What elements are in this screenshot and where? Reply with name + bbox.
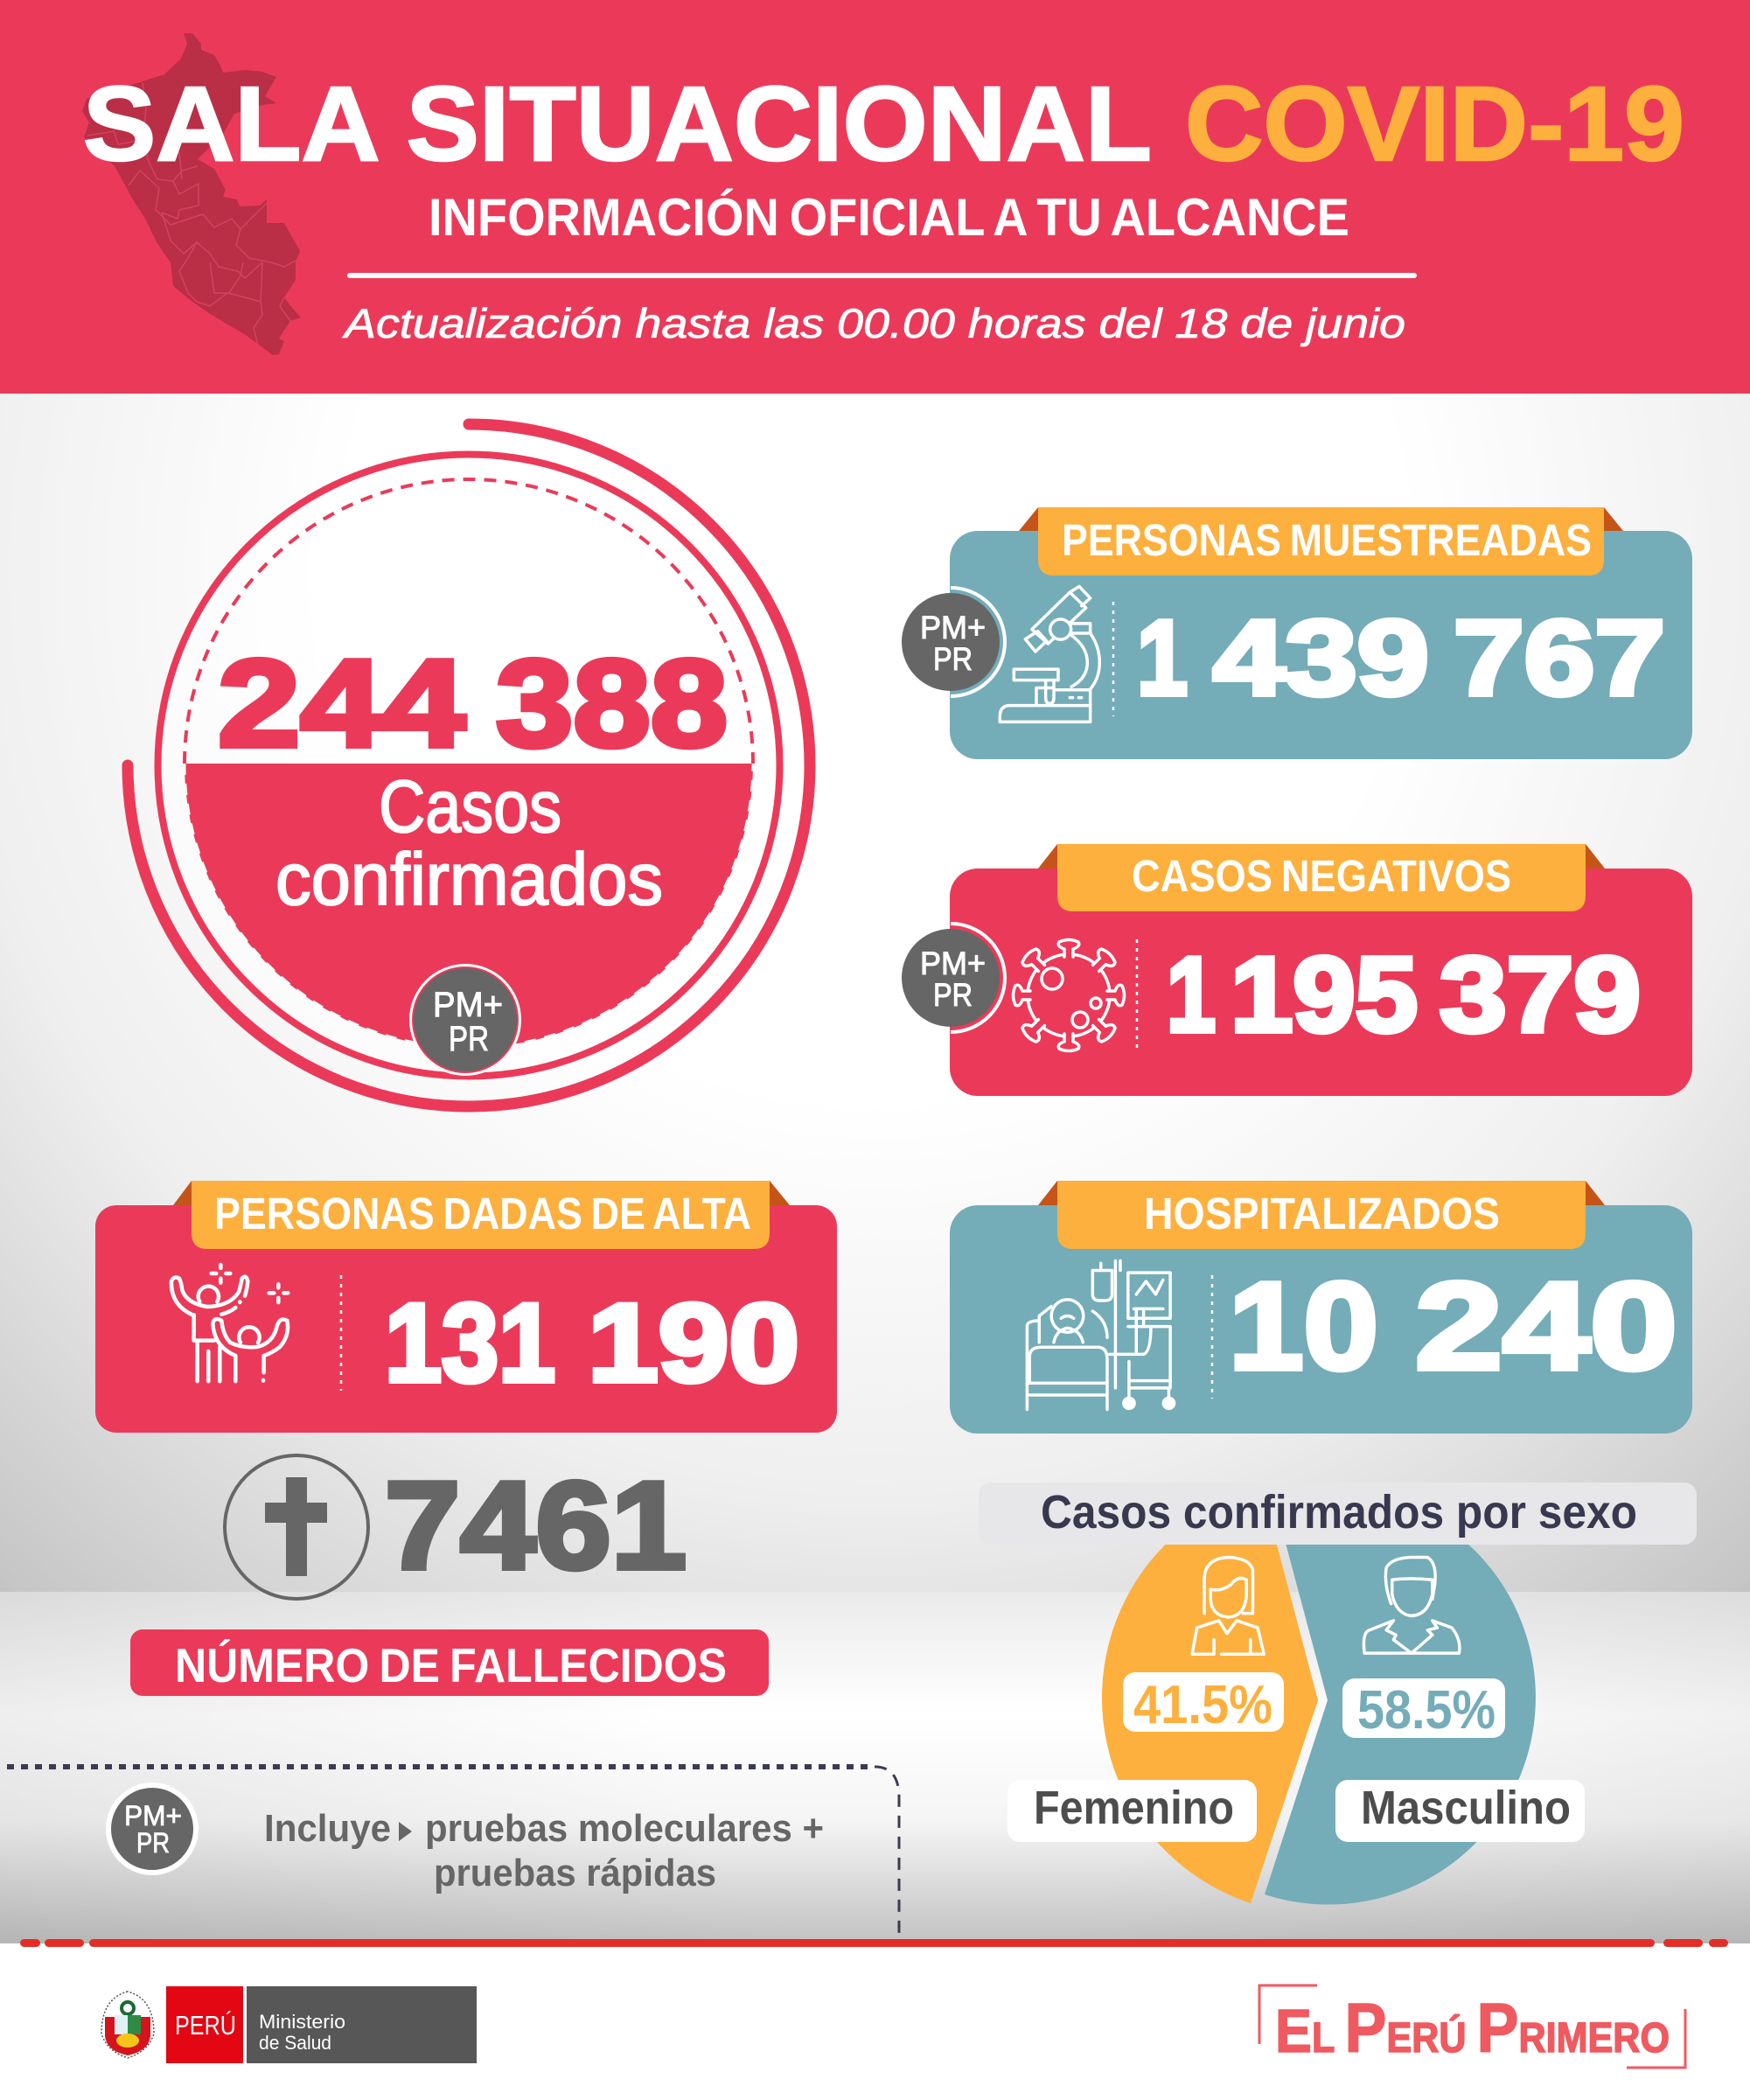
card background — [950, 531, 1692, 759]
heading tab: CASOS NEGATIVOS — [1132, 851, 1511, 901]
icon: microscope — [1000, 586, 1099, 722]
title — [83, 64, 1684, 183]
card background — [950, 1205, 1692, 1434]
divider — [340, 1275, 342, 1391]
tab folds — [1038, 1181, 1605, 1205]
value: 379 — [1440, 935, 1641, 1054]
outer arc — [128, 424, 810, 1106]
heading tab — [192, 1181, 770, 1249]
badge PM+PR — [409, 964, 521, 1076]
ministry grey box: de Salud — [259, 2032, 331, 2054]
tab folds — [173, 1181, 790, 1205]
heading tab — [1057, 844, 1586, 911]
middle ring — [157, 455, 780, 1076]
panel: casos negativos — [902, 844, 1692, 1096]
value — [1137, 598, 1665, 717]
title: COVID-19 — [1185, 64, 1684, 183]
background: upper panel — [0, 394, 1750, 1592]
value — [1229, 1257, 1677, 1396]
panel: personas dadas de alta — [95, 1181, 837, 1433]
panel: casos confirmados circle — [128, 424, 810, 1106]
value 244 388: 388 — [496, 634, 728, 773]
divider — [1112, 602, 1114, 716]
badge PM+PR: PR — [933, 641, 973, 677]
card background — [95, 1205, 837, 1433]
badge PM+PR — [902, 924, 1005, 1032]
value 244 388 — [218, 634, 728, 773]
icon: man — [1363, 1557, 1460, 1653]
note text: pruebas rápidas — [434, 1852, 716, 1894]
badge PM+PR: PM+ — [920, 945, 986, 981]
value: 10 — [1229, 1257, 1378, 1396]
divider — [1211, 1275, 1213, 1399]
dotted frame — [7, 1764, 875, 1769]
value: 439 — [1213, 598, 1429, 717]
icon: cross in circle — [225, 1455, 368, 1599]
background: lower panel shading — [0, 1592, 1750, 1943]
bracket — [1259, 1985, 1685, 2068]
note text: Incluye — [264, 1807, 391, 1850]
icon: virus — [1013, 939, 1125, 1051]
icon: celebrating people — [171, 1265, 288, 1381]
value: 190 — [588, 1280, 799, 1405]
value: 1 — [1167, 935, 1216, 1054]
heading tab: PERSONAS MUESTREADAS — [1062, 515, 1592, 565]
label casos confirmados: Casos — [379, 765, 561, 848]
wordmark: EL PERÚ PRIMERO — [1275, 1989, 1670, 2067]
update date: Actualización hasta las 00.00 horas del 18 de junio — [342, 300, 1405, 346]
badge PM+PR: PM+ — [920, 610, 986, 645]
badge PM+PR — [902, 588, 1005, 696]
label masculino: Masculino — [1361, 1782, 1571, 1834]
label casos confirmados: confirmados — [275, 838, 663, 920]
pie slice: femenino — [1102, 1489, 1318, 1903]
panel: note about tests — [7, 1767, 899, 1943]
value: 240 — [1415, 1257, 1677, 1396]
header band — [0, 0, 1750, 394]
PERU red box: PERÚ — [175, 2010, 236, 2041]
badge PM+PR: PM+ — [124, 1800, 182, 1831]
label femenino: Femenino — [1034, 1782, 1234, 1834]
card background — [950, 869, 1692, 1096]
tab folds — [1038, 844, 1605, 869]
background: lower panel — [0, 1592, 1750, 1943]
note text — [264, 1807, 824, 1894]
value: 1 — [1137, 598, 1188, 717]
chart title: Casos confirmados por sexo — [1041, 1486, 1637, 1538]
red lower half — [185, 764, 753, 1048]
heading tab: HOSPITALIZADOS — [1144, 1189, 1500, 1238]
heading tab: PERSONAS DADAS DE ALTA — [214, 1189, 751, 1238]
dashed inner ring — [185, 479, 753, 764]
logo: Ministerio de Salud — [101, 1986, 477, 2063]
title: SALA SITUACIONAL — [83, 64, 1152, 183]
panel: personas muestreadas — [902, 507, 1692, 759]
value — [1167, 935, 1641, 1054]
logo: El Peru Primero — [1259, 1985, 1685, 2068]
value 41.5%: 41.5% — [1133, 1675, 1272, 1735]
icon: coat of arms — [101, 1992, 154, 2058]
value 7461: 7461 — [385, 1456, 687, 1595]
header divider — [347, 273, 1417, 278]
badge PM+PR: PR — [449, 1020, 489, 1058]
icon: woman — [1192, 1557, 1264, 1654]
footer background — [0, 1943, 1750, 2100]
pie slice: masculino — [1265, 1490, 1536, 1904]
value: 195 — [1231, 935, 1418, 1054]
value: 131 — [385, 1280, 555, 1405]
label casos confirmados — [275, 765, 663, 920]
heading tab — [1038, 507, 1604, 576]
note text: pruebas moleculares + — [425, 1807, 824, 1850]
panel: casos confirmados por sexo — [979, 1483, 1697, 1904]
value 58.5%: 58.5% — [1357, 1680, 1496, 1741]
PERU red box — [166, 1986, 243, 2063]
divider — [1136, 939, 1138, 1053]
tab folds — [1019, 507, 1623, 531]
subtitle: INFORMACIÓN OFICIAL A TU ALCANCE — [429, 188, 1349, 247]
scalloped edge of lower half — [185, 764, 753, 1048]
badge PM+PR: PR — [933, 977, 973, 1013]
badge PM+PR: PM+ — [433, 986, 503, 1024]
panel: hospitalizados — [950, 1181, 1692, 1434]
value — [385, 1280, 799, 1405]
icon: hospital bed — [1027, 1260, 1175, 1410]
ministry grey box: Ministerio — [259, 2011, 345, 2033]
panel: fallecidos — [130, 1455, 769, 1696]
map of Peru — [82, 33, 301, 355]
label numero de fallecidos: NÚMERO DE FALLECIDOS — [175, 1638, 727, 1692]
ministry grey box — [247, 1986, 477, 2063]
badge PM+PR: PR — [136, 1827, 170, 1859]
badge PM+PR — [108, 1785, 196, 1873]
footer red line — [20, 1939, 1728, 1947]
value 244 388: 244 — [218, 634, 465, 773]
value: 767 — [1454, 598, 1665, 717]
heading tab — [1057, 1181, 1586, 1249]
